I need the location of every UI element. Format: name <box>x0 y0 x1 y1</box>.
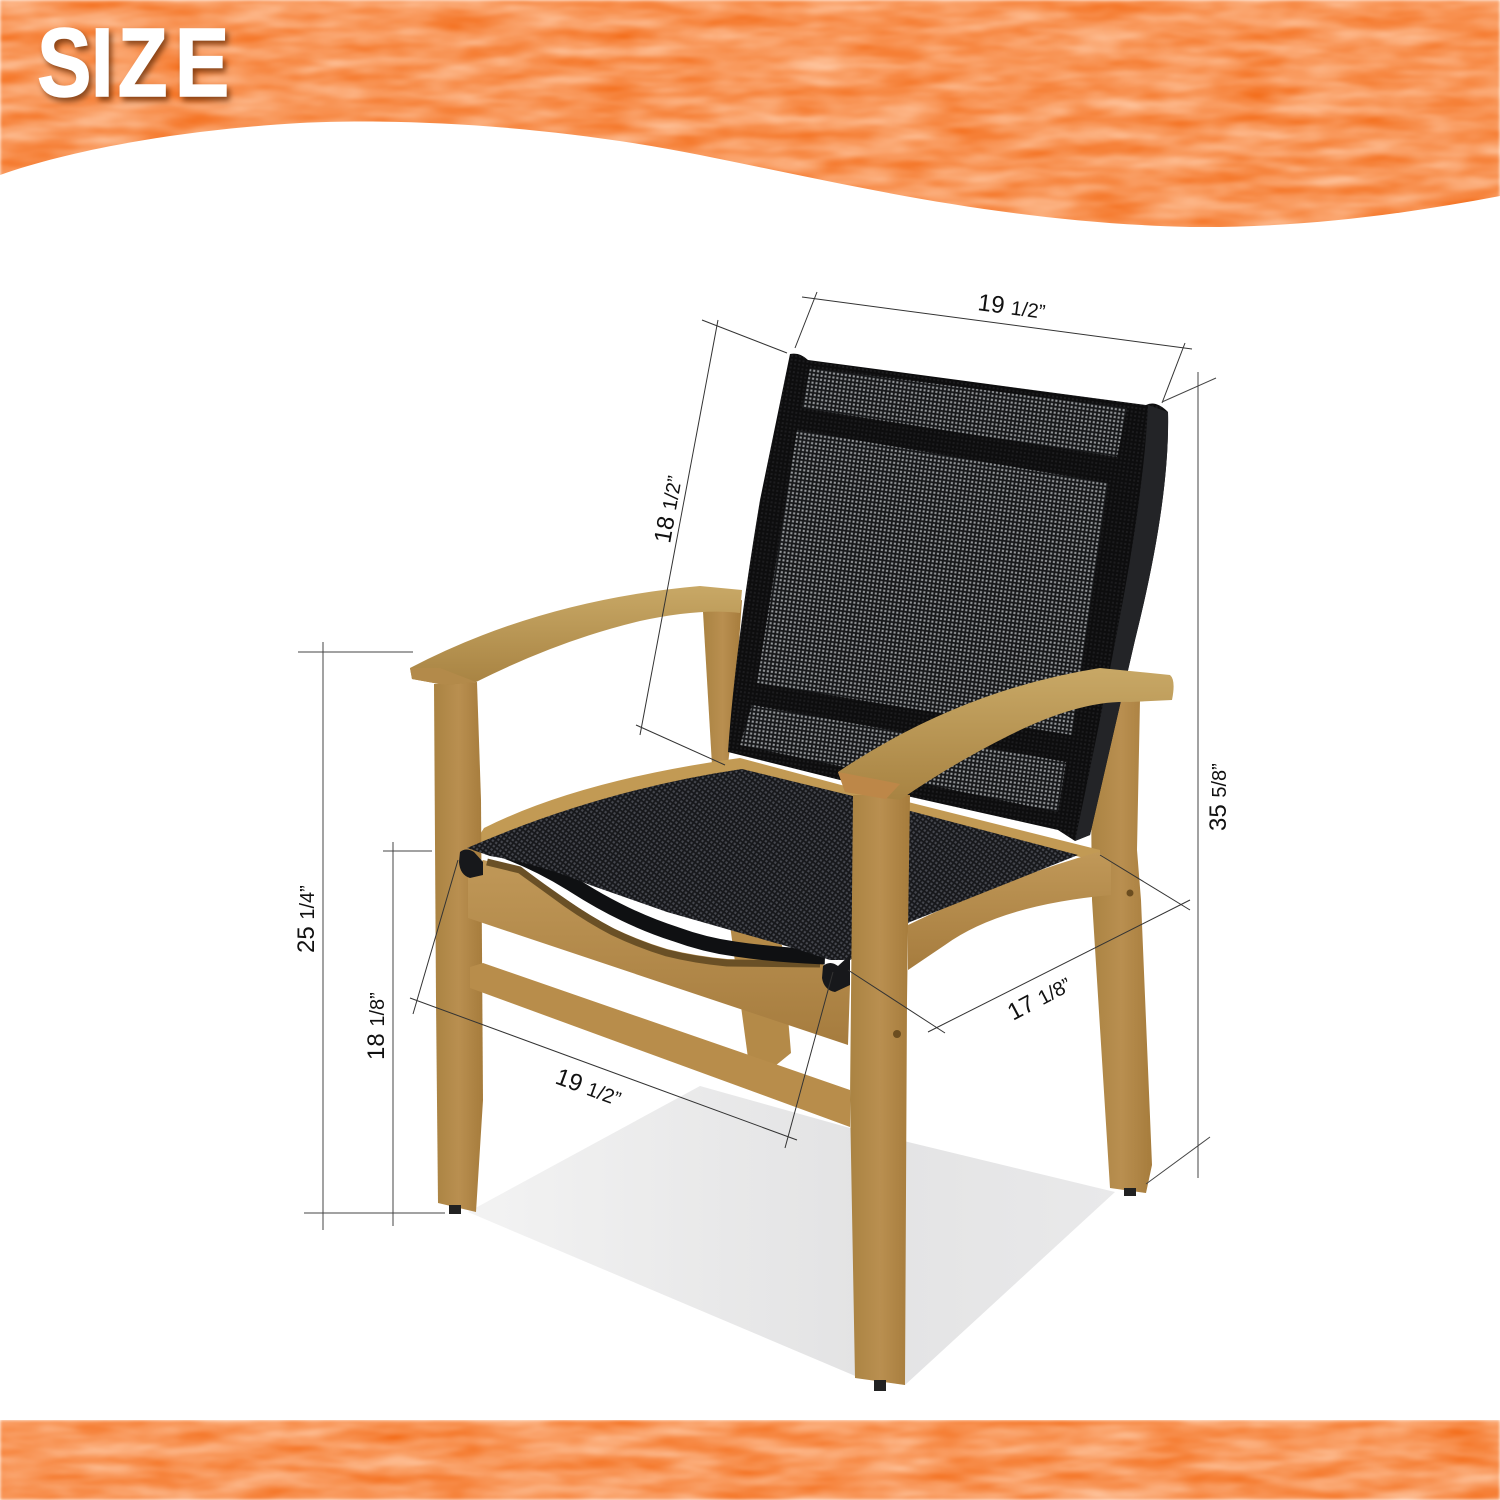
chair: left arm <box>410 586 742 685</box>
chair: left seat bracket <box>459 850 483 878</box>
floor shadow <box>468 1086 1115 1385</box>
dimension: seat depth 17 1/8 <box>848 855 1190 1033</box>
chair: lower mesh panel <box>740 705 1066 812</box>
title: SIZE <box>37 8 229 117</box>
chair: underside strap <box>505 851 825 957</box>
dimension: seat width 19 1/2 <box>410 860 833 1148</box>
chair: rear seat rail arc <box>470 758 1100 862</box>
chair: rear right leg bolt <box>1126 890 1134 896</box>
dimension: seat height 18 1/8: 18 1/8” <box>363 992 390 1060</box>
chair: rear left post <box>703 600 742 765</box>
chair: back sling <box>728 354 1168 841</box>
chair: white slit under strap <box>520 864 727 957</box>
chair: main mesh panel <box>757 430 1108 735</box>
chair: rear leg seen under seat <box>730 925 791 1066</box>
chair: upper mesh panel <box>802 368 1127 457</box>
chair: right arm <box>838 668 1174 800</box>
chair: right seat bracket <box>822 955 850 992</box>
chair: front left leg <box>434 682 483 1212</box>
top orange wavy banner <box>0 0 1500 240</box>
dimension: total height 35 5/8 <box>1146 372 1232 1184</box>
chair: front right leg bolt <box>893 1030 901 1038</box>
chair: foot glides <box>449 1188 1136 1391</box>
dimension: arm height 25 1/4: 25 1/4” <box>293 885 320 953</box>
chair: front right leg <box>850 795 910 1385</box>
chair: seat sling <box>467 769 1078 960</box>
chair: front seat rail <box>468 860 850 1045</box>
dimension: total height 35 5/8: 35 5/8” <box>1205 763 1232 831</box>
dimension: seat depth 17 1/8: 17 1/8” <box>1003 971 1076 1026</box>
chair: right arm end cap <box>838 772 900 799</box>
chair: rail shadow band <box>487 862 820 964</box>
chair: front stretcher <box>470 963 850 1127</box>
chair: rear right leg <box>1090 700 1152 1193</box>
chair: back side tube <box>1075 405 1168 841</box>
dimension: backrest height 18 1/2: 18 1/2” <box>649 474 688 545</box>
bottom orange banner <box>0 1420 1500 1500</box>
chair: right seat rail <box>908 852 1111 970</box>
dimension: backrest width 19 1/2 <box>795 289 1192 403</box>
chair: left arm end cap <box>410 668 476 685</box>
chair photo illustration <box>410 354 1174 1391</box>
dimension: seat width 19 1/2: 19 1/2” <box>552 1063 625 1112</box>
dimension: backrest width 19 1/2: 19 1/2” <box>976 289 1047 325</box>
dimension: backrest height 18 1/2 <box>636 320 787 765</box>
